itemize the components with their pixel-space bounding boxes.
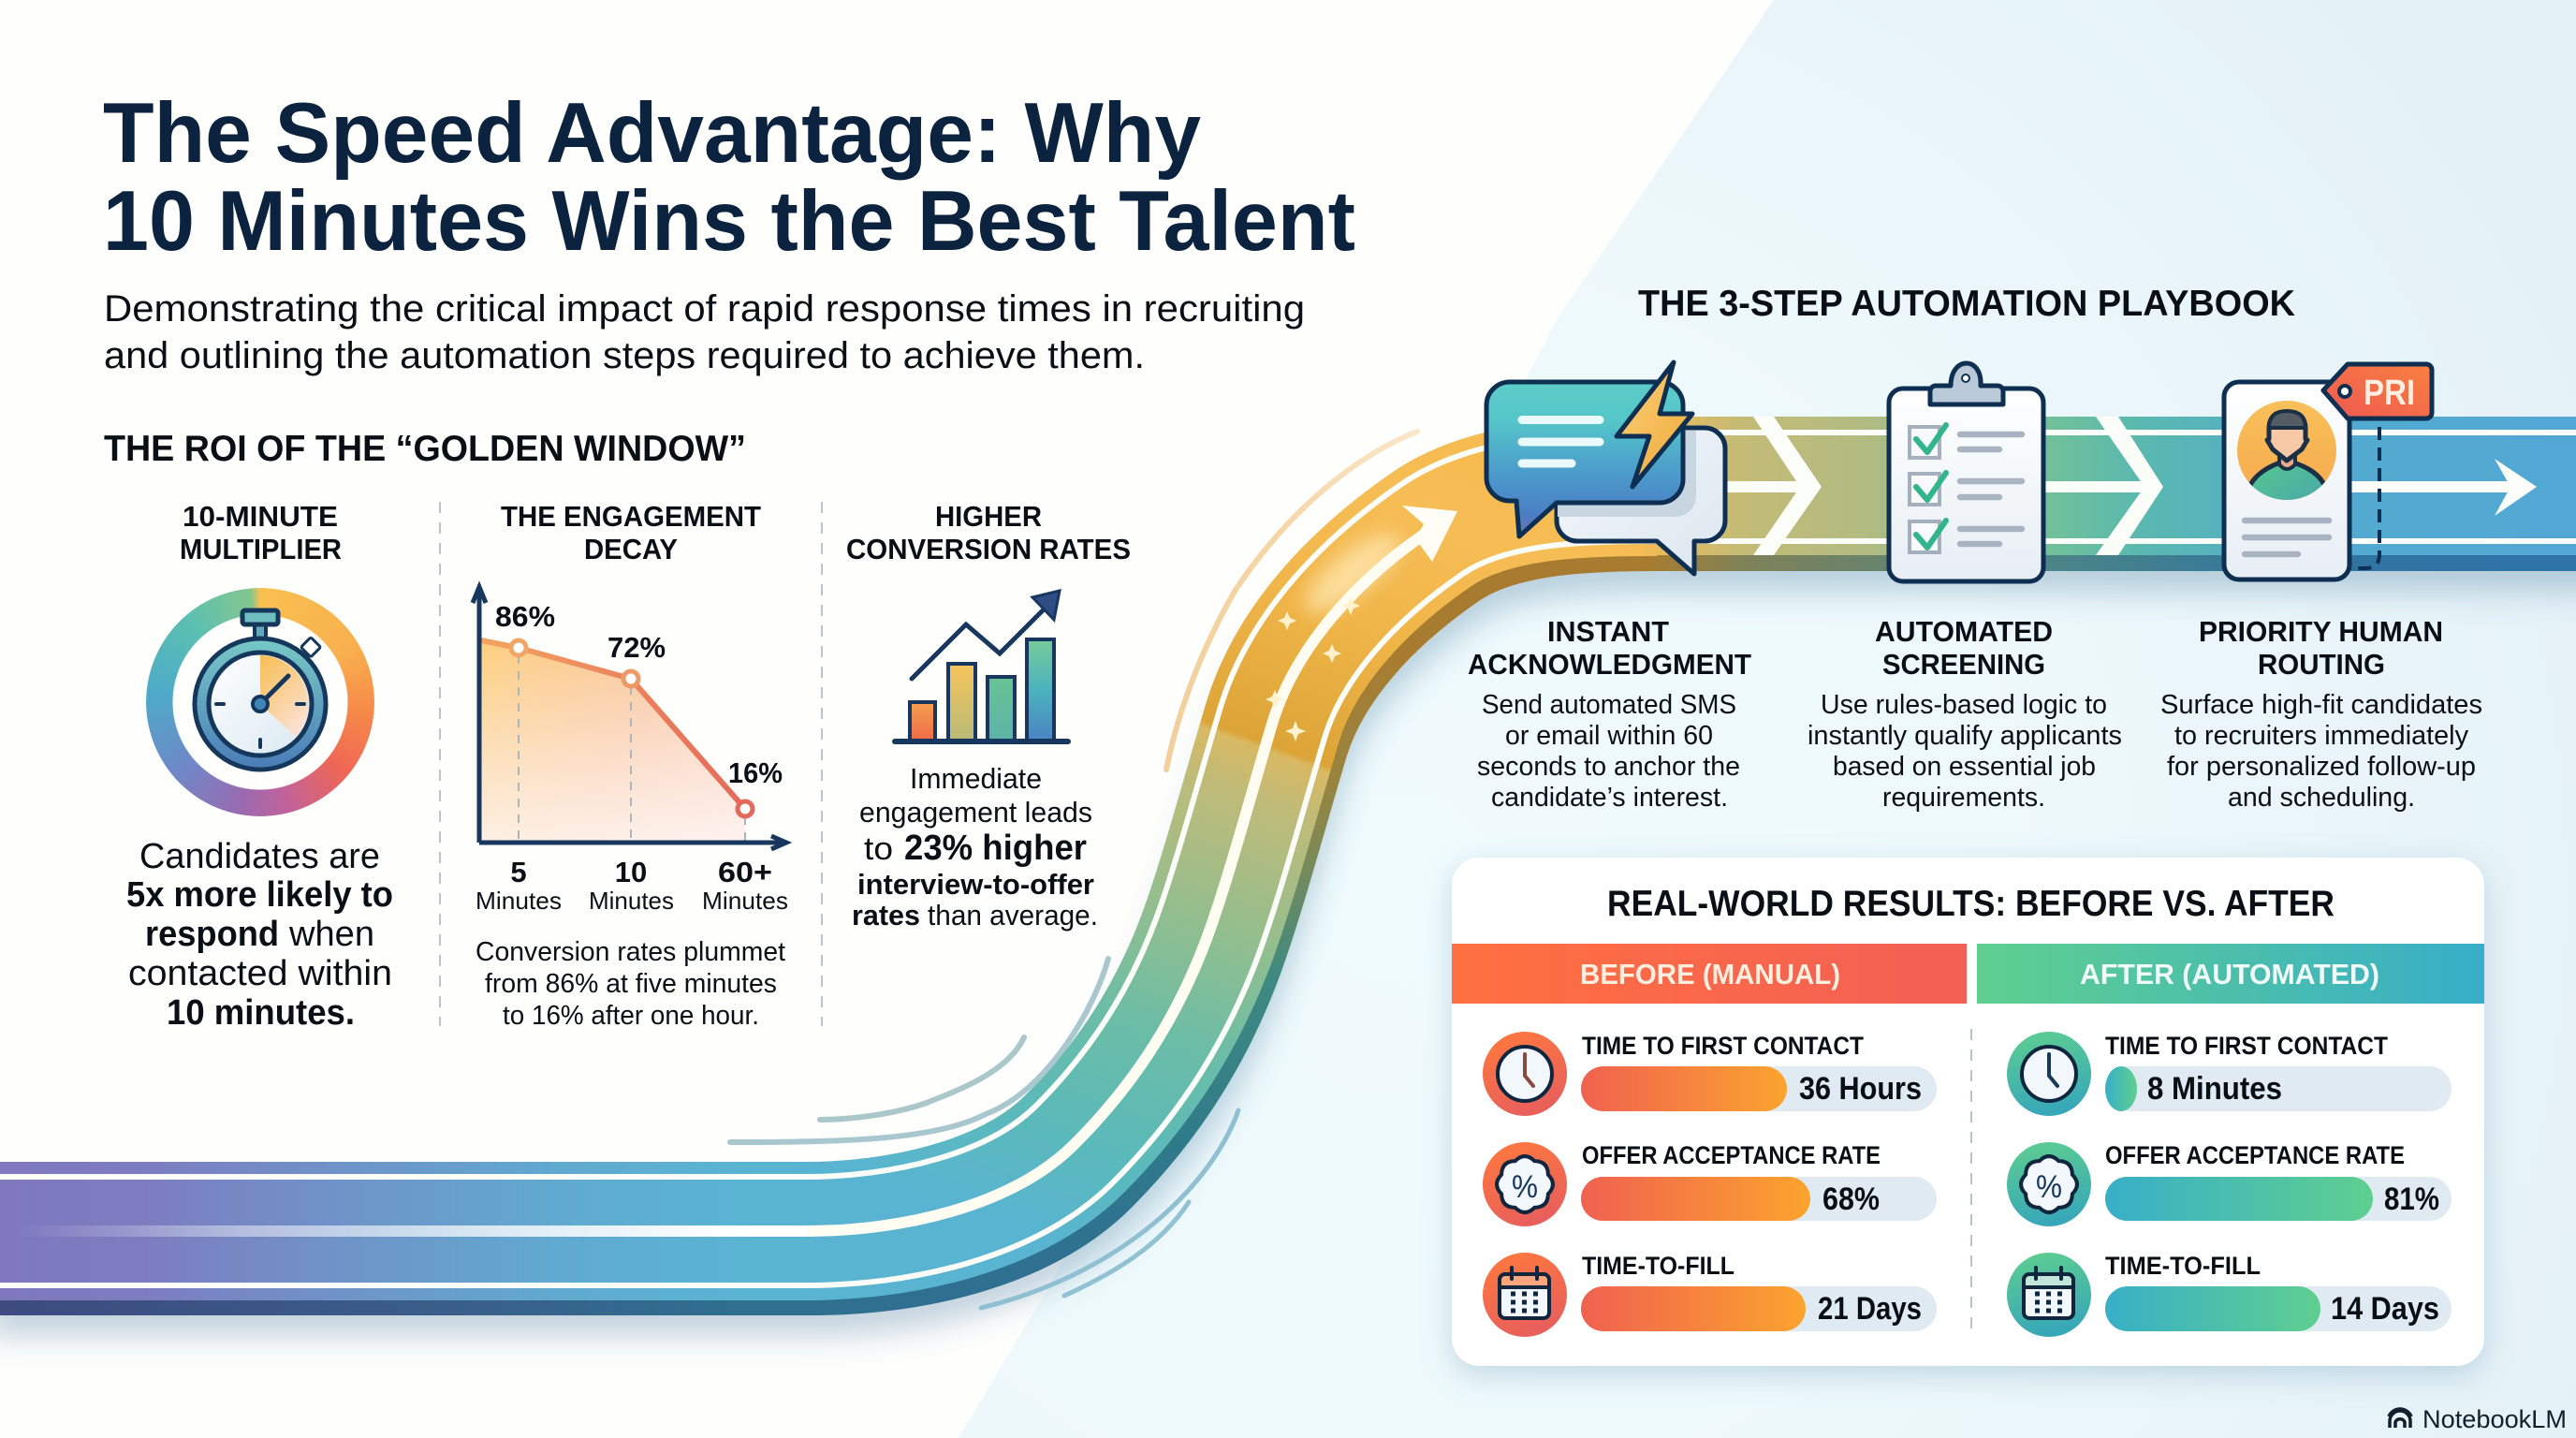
before: offer acceptance rate: 68% [1822,1181,1880,1217]
header: after automated: AFTER (AUTOMATED) [2080,958,2379,990]
after: offer acceptance rate [2007,1141,2452,1226]
before: time to fill: 21 Days [1818,1291,1922,1327]
section heading: golden window: THE ROI OF THE “GOLDEN WINDOW” [104,429,746,469]
before: offer acceptance rate: OFFER ACCEPTANCE RATE [1582,1141,1881,1169]
text: 5x more likely [126,837,393,1033]
text: 23% higher: engagement leads [859,796,1092,829]
step 1 text: instant acknowledgment: INSTANT [1547,615,1669,648]
panel: higher conversion rates [846,500,1131,932]
header: after automated [1977,944,2484,1004]
icon: stopwatch with gradient ring [146,588,374,816]
text: 5x more likely: respond [145,915,279,954]
heading: multiplier: MULTIPLIER [180,533,342,565]
chart: conversion decay area line: 10 [615,856,647,888]
ribbon: flowing path from left to right [0,417,2576,1267]
after: time to fill [2007,1252,2452,1337]
before: time to first contact [1483,1032,1937,1116]
step 1 text: instant acknowledgment: seconds to anchor the [1477,752,1740,782]
title [103,86,1355,269]
title: The Speed Advantage: Why [103,86,1201,181]
after: offer acceptance rate: OFFER ACCEPTANCE RATE [2105,1141,2405,1169]
section heading: playbook: THE 3-STEP AUTOMATION PLAYBOOK [1638,284,2295,324]
before: time to first contact: TIME TO FIRST CONTACT [1582,1032,1864,1060]
chart: conversion decay area line: 16% [728,756,783,789]
heading: multiplier [180,500,342,565]
sparkles on golden curve [1266,596,1360,741]
before: offer acceptance rate [1483,1141,1937,1226]
text: 5x more likely: contacted within [128,954,392,993]
chart: conversion decay area line: 60+ [718,856,772,888]
after: time to first contact: TIME TO FIRST CONTACT [2105,1032,2388,1060]
before: time to fill: TIME-TO-FILL [1582,1252,1734,1280]
panel: 10-minute multiplier [126,500,393,1033]
speed lines around ribbon [730,432,1417,1308]
panel: real-world results [1452,858,2484,1366]
chart: conversion decay area line: Minutes [476,887,562,915]
text: 23% higher: 23% higher [904,829,1087,868]
text: 23% higher: interview-to-offer [857,868,1094,901]
heading: decay [501,500,761,565]
step 3 text: priority human routing: and scheduling. [2228,783,2415,813]
step 1 text: instant acknowledgment: candidate’s interest. [1491,783,1728,813]
text: 5x more likely: when [288,915,374,954]
card background [1452,858,2484,1366]
header: before manual [1452,944,1967,1004]
icon: rising bar chart with arrow [895,591,1068,741]
step 3 text: priority human routing: PRIORITY HUMAN [2199,615,2443,648]
step 2 text: automated screening: AUTOMATED [1875,615,2053,648]
step 3 text: priority human routing: for personalized follow-up [2167,752,2476,782]
after: time to first contact: 8 Minutes [2147,1071,2282,1107]
text: decay caption [476,937,785,1031]
step 2 text: automated screening: Use rules-based logic to [1821,690,2107,720]
step 1 text: instant acknowledgment: or email within 60 [1505,721,1713,751]
text: 23% higher [852,762,1098,932]
logo: NotebookLM: NotebookLM [2422,1405,2567,1433]
chevron arrows on ribbon [1725,417,2537,555]
text: 5x more likely: 5x more likely to [126,875,393,915]
text: decay caption: to 16% after one hour. [503,1001,759,1031]
step 3 text: priority human routing [2160,615,2482,813]
heading: multiplier: 10-MINUTE [183,500,338,533]
step 1 text: instant acknowledgment [1468,615,1751,813]
header: before manual: BEFORE (MANUAL) [1580,958,1840,990]
text: 5x more likely: Candidates are [139,837,380,876]
after: time to first contact [2007,1032,2452,1116]
chart: conversion decay area line: 86% [495,600,555,633]
heading: decay: THE ENGAGEMENT [501,500,761,533]
icon: candidate profile card with priority tag: PRI [2364,374,2415,413]
step 1 text: instant acknowledgment: Send automated SMS [1482,690,1736,720]
after: offer acceptance rate: 81% [2384,1181,2439,1217]
icon: speech bubbles with lightning bolt [1486,362,1725,574]
step 2 text: automated screening [1808,615,2122,813]
icon: candidate profile card with priority tag [2224,364,2432,580]
subtitle: and outlining the automation steps required to achieve them. [104,335,1145,376]
background: pale blue diagonal panel [959,0,2576,1438]
panel: engagement decay [473,500,788,1031]
text: decay caption: from 86% at five minutes [485,969,777,999]
step 2 text: automated screening: instantly qualify applicants [1808,721,2122,751]
before: time to fill [1483,1252,1937,1337]
step 3 text: priority human routing: ROUTING [2258,648,2385,681]
text: 23% higher: to [864,831,893,867]
step 3 text: priority human routing: to recruiters immediately [2174,721,2468,751]
heading: conversion: HIGHER [935,500,1042,533]
chart: conversion decay area line: 5 [510,856,527,888]
after: time to fill: TIME-TO-FILL [2105,1252,2261,1280]
text: 23% higher: than average. [928,899,1098,932]
heading: decay: DECAY [584,533,678,565]
after: time to fill: 14 Days [2331,1291,2439,1327]
heading: conversion: CONVERSION RATES [846,533,1131,565]
step 1 text: instant acknowledgment: ACKNOWLEDGMENT [1468,648,1751,681]
chart: conversion decay area line [473,587,788,915]
text: 5x more likely: 10 minutes. [167,993,355,1033]
subtitle [104,288,1305,376]
chart: conversion decay area line: 72% [607,631,666,664]
step 2 text: automated screening: SCREENING [1882,648,2045,681]
step 2 text: automated screening: based on essential job [1833,752,2096,782]
text: 23% higher: Immediate [910,762,1042,795]
chart: conversion decay area line: Minutes [589,887,674,915]
subtitle: Demonstrating the critical impact of rapid response times in recruiting [104,288,1305,330]
text: decay caption: Conversion rates plummet [476,937,785,967]
title: 10 Minutes Wins the Best Talent [103,174,1355,269]
before: offer acceptance rate: % [1512,1169,1538,1205]
heading: conversion [846,500,1131,565]
step 3 text: priority human routing: Surface high-fit candidates [2160,690,2482,720]
before: time to first contact: 36 Hours [1799,1071,1922,1107]
arrow on golden curve [1402,506,1457,562]
step 2 text: automated screening: requirements. [1882,783,2045,813]
text: 23% higher: rates [852,899,920,932]
after: offer acceptance rate: % [2036,1169,2062,1205]
heading: results: REAL-WORLD RESULTS: BEFORE VS. AFTER [1607,884,2334,924]
icon: clipboard checklist [1889,363,2043,581]
chart: conversion decay area line: Minutes [702,887,788,915]
